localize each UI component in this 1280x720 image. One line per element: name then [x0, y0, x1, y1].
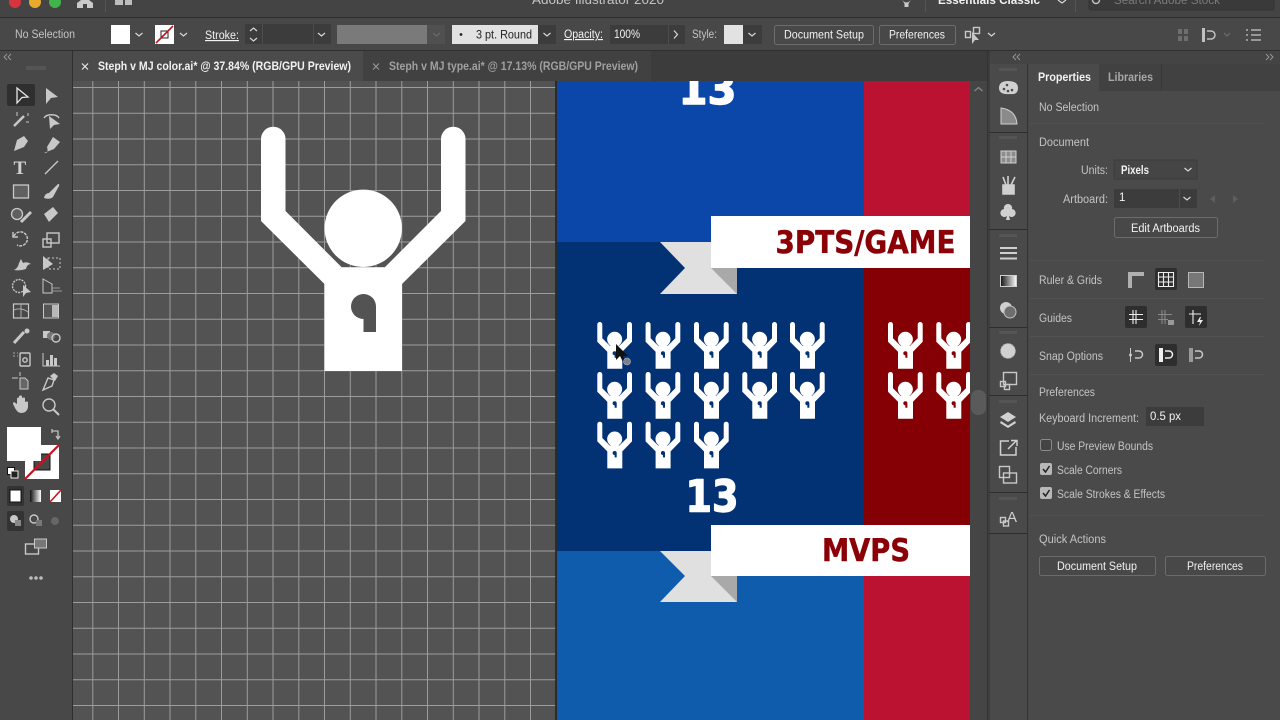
- document setup button: Document Setup: [784, 30, 864, 42]
- eyedropper and blend: [14, 328, 60, 343]
- document section: Units:: [1081, 165, 1108, 177]
- canvas scrollbar: [970, 81, 987, 720]
- document setup button: [774, 26, 874, 44]
- preferences section: 0.5 px: [1150, 411, 1181, 423]
- artboard and slice tools: [12, 372, 58, 390]
- icon: gradient: [1000, 276, 1016, 286]
- panel tabs: Libraries: [1108, 72, 1153, 84]
- cursor: [616, 344, 630, 365]
- top blue band: [557, 81, 864, 242]
- player icons: blue column, 13: [597, 322, 825, 468]
- change screen mode: [26, 539, 46, 554]
- draw mode buttons: [7, 511, 59, 531]
- control bar: [0, 18, 1280, 51]
- direct selection tool: [46, 88, 58, 104]
- opacity: [564, 25, 685, 44]
- preferences button: Preferences: [889, 30, 945, 42]
- icon: brushes: [1003, 176, 1015, 194]
- icon: swatches: [1001, 151, 1016, 163]
- checkbox: scale strokes and effects: Scale Strokes & Effects: [1057, 489, 1165, 501]
- preferences button: [880, 26, 956, 44]
- ribbon: 3pts per game: 3PTS/GAME: [776, 225, 956, 261]
- inactive tab: [363, 51, 651, 81]
- icon: appearance: [1000, 344, 1016, 358]
- dark red band: [864, 242, 970, 551]
- fill swatch: [111, 25, 142, 44]
- icon: export: [1000, 440, 1017, 455]
- checkbox: scale corners: [1040, 463, 1122, 477]
- checkbox: scale strokes and effects: [1040, 487, 1165, 501]
- quick actions: Document Setup: [1057, 561, 1137, 573]
- control bar: No Selection: [15, 29, 75, 41]
- shape builder and perspective: [12, 279, 62, 297]
- snap options: Snap Options: [1039, 351, 1103, 363]
- swap and default colours: [8, 429, 60, 478]
- number: 13: 13: [686, 472, 738, 522]
- ruler and grids: Ruler & Grids: [1039, 275, 1102, 287]
- style: [692, 25, 762, 44]
- guides: Guides: [1039, 313, 1072, 325]
- icon: asset type: A: [1007, 509, 1017, 526]
- document section: Document: [1039, 137, 1090, 149]
- checkbox: use preview bounds: Use Preview Bounds: [1057, 441, 1153, 453]
- style: Style:: [692, 29, 717, 41]
- hand and zoom tools: [13, 396, 59, 415]
- quick actions: [1030, 516, 1266, 576]
- more tools: [29, 576, 43, 580]
- left tools panel: [0, 51, 73, 720]
- document section: Edit Artboards: [1131, 223, 1200, 235]
- stroke swatch large: [25, 445, 59, 479]
- pen tools: [14, 136, 60, 153]
- icon: artboards: [1000, 372, 1016, 390]
- icon: transparency: [1000, 302, 1016, 318]
- type tool: T: [14, 158, 26, 179]
- preferences section: [1030, 374, 1265, 501]
- artboard: infographic: [557, 64, 971, 720]
- icon: color palette: [999, 81, 1018, 94]
- icon: symbols club: [1000, 204, 1016, 220]
- document section: 1: [1119, 192, 1125, 204]
- icon: stroke: [1000, 248, 1017, 258]
- lower red band: [864, 551, 970, 720]
- active tab: Steph v MJ color.ai* @ 37.84% (RGB/GPU Preview): [98, 61, 351, 73]
- mesh and gradient: [14, 304, 58, 318]
- snap options: [1030, 336, 1265, 366]
- title bar: [0, 0, 1280, 18]
- line tool: [45, 161, 58, 174]
- canvas pasteboard with grid: [73, 81, 557, 720]
- stroke swatch: [155, 25, 187, 44]
- ribbon: 3pts per game: [660, 216, 970, 294]
- icon: arrange: [966, 28, 995, 44]
- icon: color guide: [1001, 108, 1017, 124]
- paintbrush tool: [44, 184, 59, 199]
- stroke weight field: [245, 24, 331, 44]
- panel tabs: Properties: [1038, 72, 1091, 84]
- opacity: Opacity:: [564, 29, 603, 41]
- rectangle tool: [14, 185, 28, 198]
- top red band: [864, 81, 970, 242]
- large player icon: [261, 127, 466, 371]
- right icon dock: [987, 51, 1280, 720]
- quick actions: Quick Actions: [1039, 534, 1106, 546]
- checkbox: scale corners: Scale Corners: [1057, 465, 1122, 477]
- active tab: [73, 51, 363, 81]
- shaper and eraser: [12, 207, 58, 222]
- opacity: 100%: [614, 29, 640, 41]
- icon: asset type: [1000, 509, 1017, 526]
- rotate and scale: [13, 232, 59, 247]
- quick actions: Preferences: [1187, 561, 1243, 573]
- brush definition: 3 pt. Round: [476, 30, 532, 42]
- stroke label: Stroke:: [205, 30, 239, 42]
- brush definition: [452, 25, 556, 44]
- document tab bar: [73, 51, 989, 81]
- selection tool: [7, 84, 35, 106]
- preferences section: Preferences: [1039, 387, 1095, 399]
- panel tabs: [1029, 64, 1280, 91]
- ribbon: MVPs: [660, 525, 970, 602]
- warp and free transform: [14, 256, 60, 270]
- lower blue band: [557, 551, 864, 720]
- selection status: No Selection: [1039, 102, 1099, 114]
- colour mode buttons: [7, 486, 61, 506]
- icon: layers: [1000, 412, 1016, 428]
- document section: Artboard:: [1063, 194, 1108, 206]
- dark blue band: [557, 242, 864, 551]
- variable width profile: [337, 25, 445, 44]
- inactive tab: Steph v MJ type.ai* @ 17.13% (RGB/GPU Preview): [389, 61, 638, 73]
- symbol sprayer and graph: [13, 353, 60, 366]
- guides: [1030, 298, 1265, 328]
- properties panel: [1029, 64, 1280, 720]
- ribbon: MVPs: MVPS: [822, 533, 910, 569]
- magic wand and lasso: [14, 112, 60, 129]
- document section: [1030, 124, 1265, 238]
- icon: align and menu: [1178, 28, 1261, 42]
- document section: Pixels: [1121, 165, 1149, 177]
- icon: pathfinder: [1000, 466, 1016, 483]
- player icons: red column: [888, 322, 970, 419]
- preferences section: Keyboard Increment:: [1039, 413, 1139, 425]
- ruler and grids: [1030, 260, 1265, 290]
- fill swatch large: [7, 427, 41, 461]
